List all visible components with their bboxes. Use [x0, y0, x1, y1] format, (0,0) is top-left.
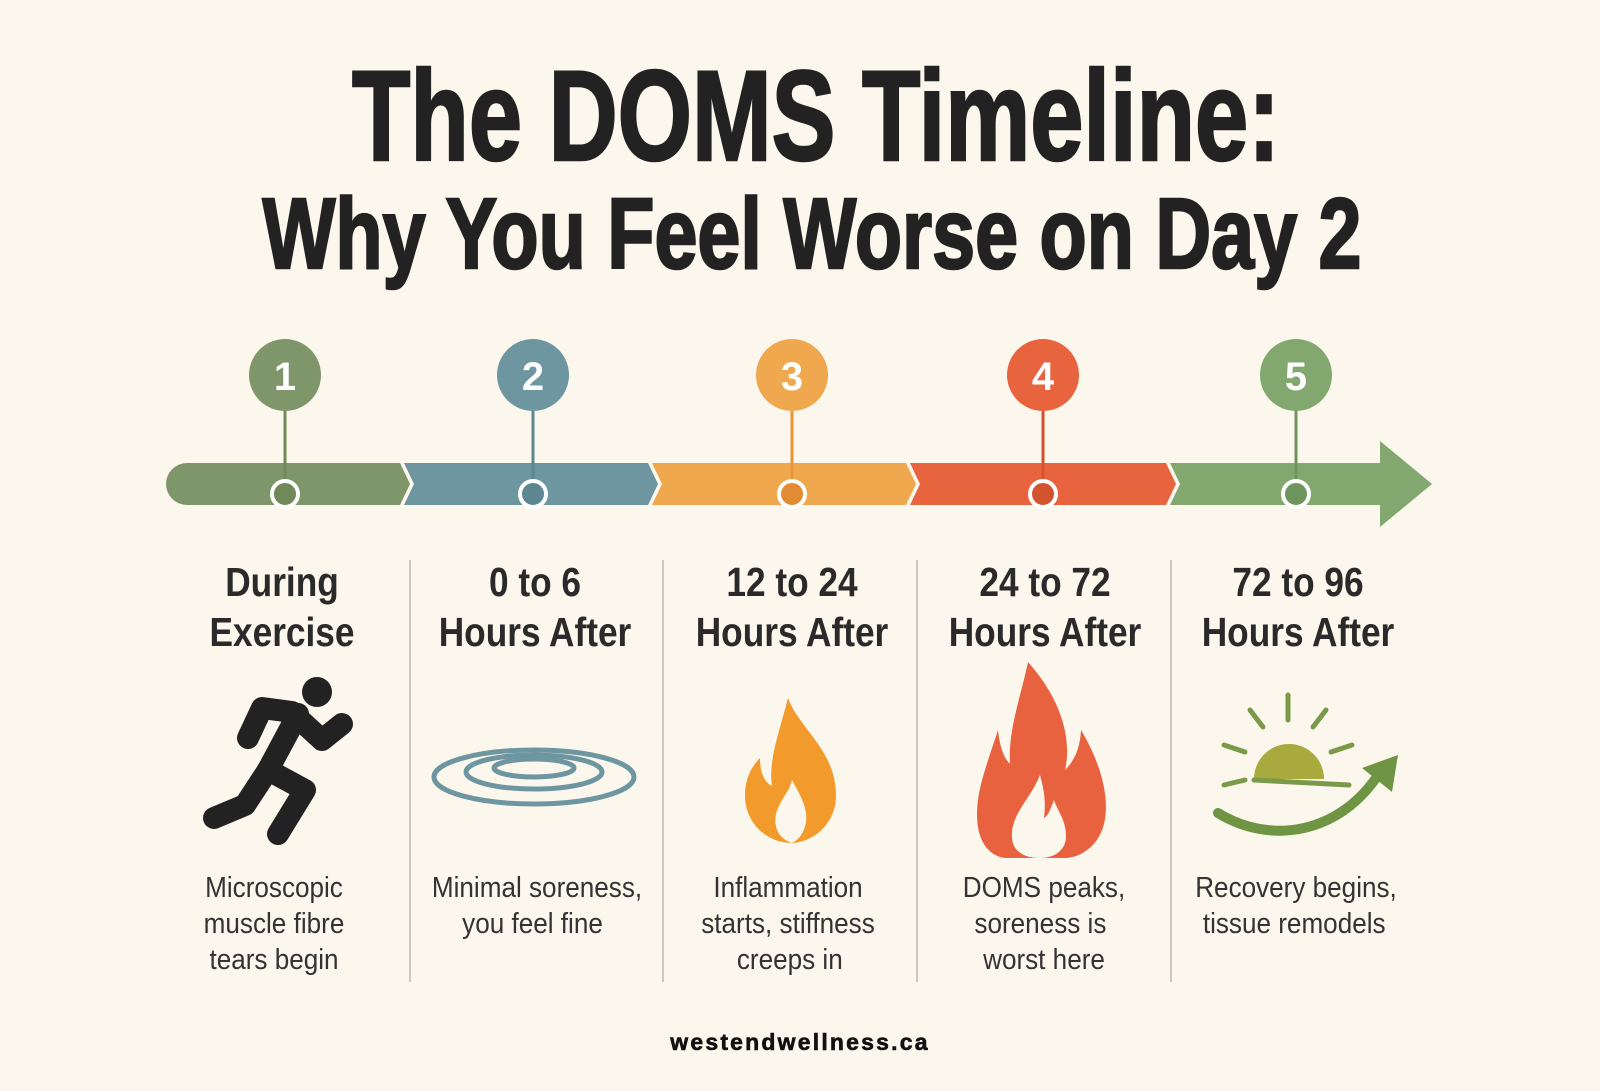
heading 2: 0 to 6 — [489, 560, 581, 606]
heading 1: Exercise — [209, 610, 355, 656]
description 4: soreness is — [974, 907, 1106, 939]
heading 3: Hours After — [696, 610, 888, 656]
column 2 — [432, 560, 642, 939]
marker 1: 1 — [274, 355, 296, 399]
description 2: you feel fine — [462, 907, 603, 939]
marker 3: 3 — [781, 355, 803, 399]
icon: flame inner — [1012, 775, 1066, 858]
column 1 — [204, 560, 355, 975]
marker 2 — [497, 339, 569, 507]
marker 5 — [1260, 339, 1332, 507]
description 1: tears begin — [209, 943, 339, 975]
icon: running man — [214, 677, 342, 834]
marker 1 — [249, 339, 321, 507]
marker 4 — [1007, 339, 1079, 507]
icon: ripples — [434, 750, 634, 804]
timeline arrow bar — [166, 441, 1432, 527]
marker 2: 2 — [522, 355, 544, 399]
icon: sunrise with arrow — [1218, 695, 1398, 831]
heading 2: Hours After — [439, 610, 631, 656]
description 4: worst here — [982, 943, 1105, 975]
description 3: creeps in — [737, 943, 843, 975]
heading 1: During — [225, 560, 339, 606]
title: The DOMS Timeline: — [352, 45, 1280, 188]
icon: big flame — [977, 662, 1106, 858]
footer: westendwellness.ca — [669, 1029, 930, 1055]
description 1: muscle fibre — [204, 907, 344, 939]
column 4 — [949, 560, 1141, 975]
marker 5: 5 — [1285, 355, 1307, 399]
marker 3 — [756, 339, 828, 507]
description 1: Microscopic — [205, 871, 343, 903]
description 4: DOMS peaks, — [963, 871, 1125, 903]
heading 5: 72 to 96 — [1232, 560, 1364, 606]
marker 4: 4 — [1032, 355, 1055, 399]
description 5: Recovery begins, — [1195, 871, 1397, 903]
heading 4: Hours After — [949, 610, 1141, 656]
description 3: Inflammation — [713, 871, 863, 903]
description 5: tissue remodels — [1203, 907, 1386, 939]
heading 4: 24 to 72 — [979, 560, 1111, 606]
description 2: Minimal soreness, — [432, 871, 642, 903]
title — [262, 45, 1362, 290]
heading 3: 12 to 24 — [726, 560, 858, 606]
column 5 — [1195, 560, 1398, 939]
description 3: starts, stiffness — [701, 907, 875, 939]
column 3 — [696, 560, 888, 975]
icon: small flame — [745, 698, 836, 843]
heading 5: Hours After — [1202, 610, 1394, 656]
